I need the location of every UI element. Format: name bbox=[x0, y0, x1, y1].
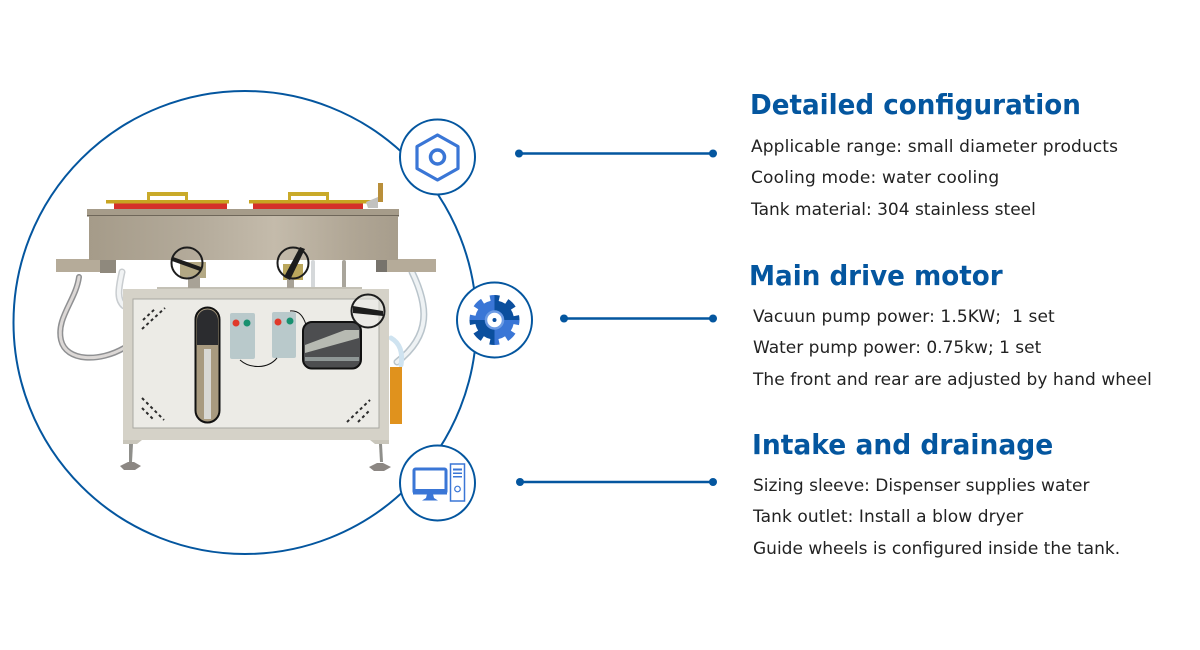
spec list: Sizing sleeve: Dispenser supplies water bbox=[753, 476, 1090, 496]
icon badge: computer bbox=[400, 446, 475, 520]
section: intake and drainage bbox=[752, 428, 1120, 559]
heading: Main drive motor bbox=[749, 259, 1003, 292]
spec list: The front and rear are adjusted by hand wheel bbox=[753, 370, 1152, 390]
side brackets bbox=[56, 259, 116, 272]
large ring bbox=[14, 91, 476, 554]
hoses bbox=[60, 262, 424, 365]
orange drive box bbox=[390, 367, 402, 424]
heading: Intake and drainage bbox=[752, 428, 1053, 461]
spec list: Water pump power: 0.75kw; 1 set bbox=[753, 338, 1041, 358]
connector line 3 bbox=[516, 478, 717, 486]
icon badge: hex nut bbox=[400, 120, 475, 194]
spec list: Tank outlet: Install a blow dryer bbox=[753, 507, 1023, 527]
legs and feet bbox=[120, 440, 391, 471]
spec list: Tank material: 304 stainless steel bbox=[751, 200, 1036, 220]
spec list: Applicable range: small diameter products bbox=[751, 137, 1118, 157]
spec list: Vacuun pump power: 1.5KW; 1 set bbox=[753, 307, 1055, 327]
icon badge: gear puzzle bbox=[457, 282, 532, 358]
spec list bbox=[750, 137, 1118, 220]
under-tank fittings bbox=[157, 287, 362, 290]
machine photo illustration bbox=[56, 183, 436, 471]
control box 2 bbox=[272, 312, 296, 358]
spec list bbox=[752, 307, 1152, 390]
panel hand wheel bbox=[352, 294, 384, 328]
spec list: Cooling mode: water cooling bbox=[751, 168, 999, 188]
connector line 2 bbox=[560, 314, 717, 322]
vents bbox=[142, 308, 370, 422]
tank bbox=[87, 209, 399, 215]
spec list bbox=[752, 476, 1120, 559]
control box 1 bbox=[230, 313, 255, 359]
connector line 1 bbox=[515, 150, 717, 158]
inspection window bbox=[303, 322, 361, 368]
right hand wheel bbox=[278, 247, 308, 280]
diagram: machine, ring, icons and connectors bbox=[12, 90, 717, 555]
gauge window bbox=[196, 308, 220, 422]
heading: Detailed configuration bbox=[750, 88, 1081, 121]
lids and handles bbox=[106, 183, 383, 210]
section: detailed configuration bbox=[750, 88, 1118, 220]
spec list: Guide wheels is configured inside the tank. bbox=[753, 539, 1120, 559]
section: main drive motor bbox=[749, 259, 1152, 390]
cabinet bbox=[123, 289, 389, 440]
left hand wheel bbox=[172, 248, 202, 278]
